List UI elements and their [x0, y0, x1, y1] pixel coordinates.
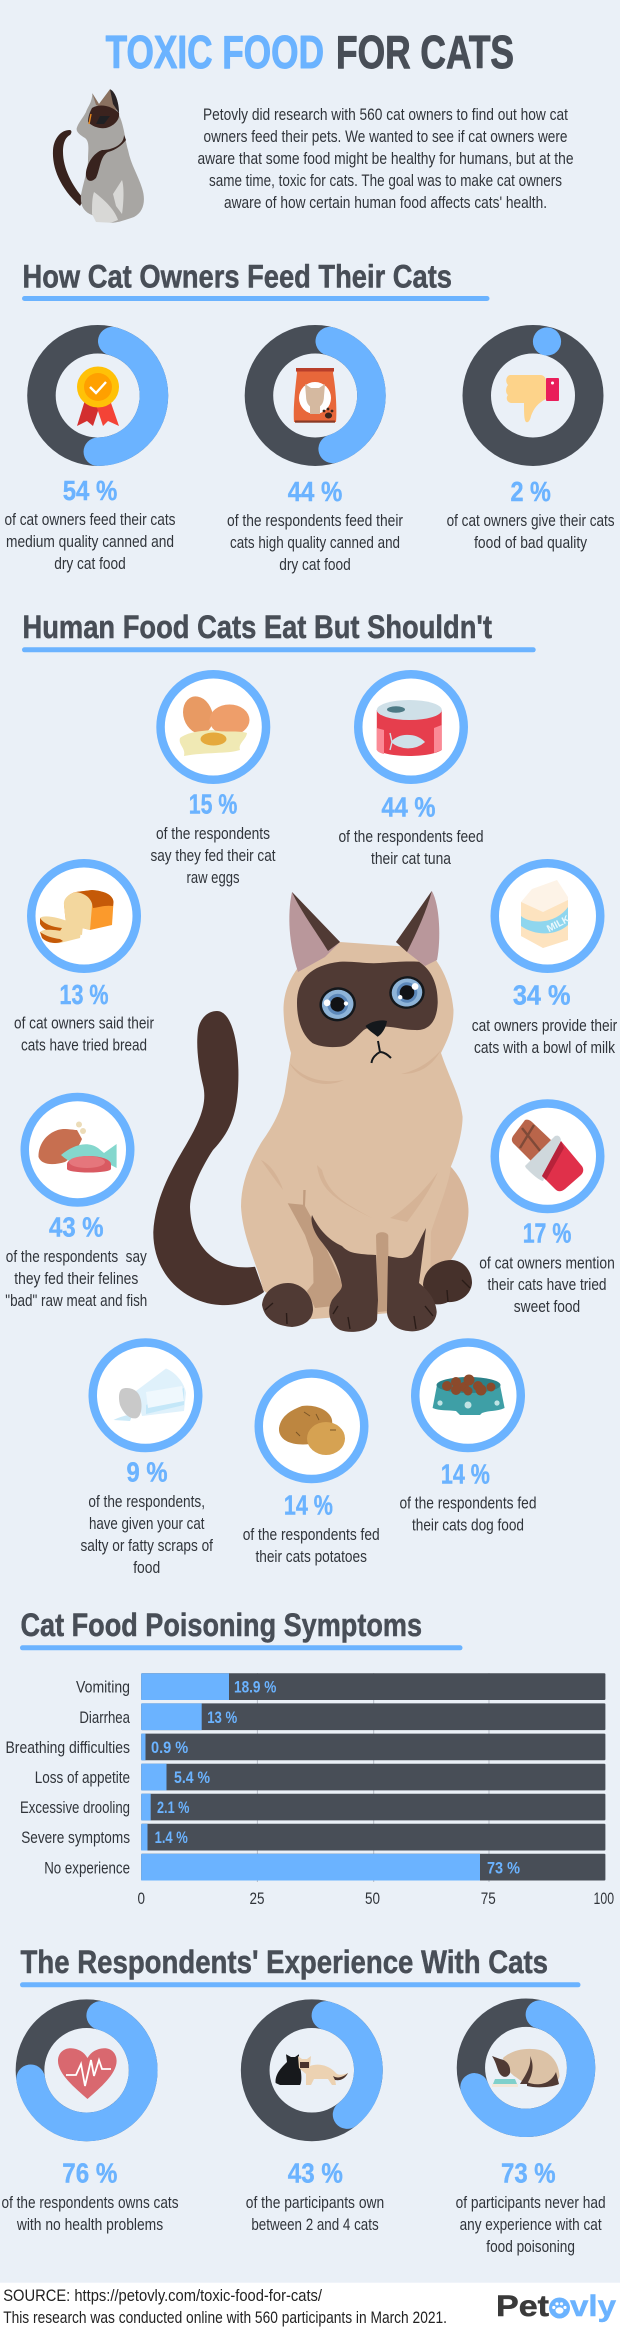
panel: 73 percent: 73 % — [501, 2157, 556, 2188]
panel: 44 percent: cats high quality canned and — [230, 533, 400, 552]
intro text — [198, 105, 574, 212]
panel: raw meat and fish: of the respondents say — [6, 1247, 147, 1266]
panel: tuna: 44 % — [382, 792, 436, 823]
panel: 2 percent: 2 % — [510, 476, 551, 507]
illustration: sad siamese cat — [153, 891, 472, 1332]
panel: raw meat and fish: they fed their felines — [14, 1269, 138, 1288]
panel: 76 percent: 76 % — [62, 2157, 117, 2188]
panel: dog food: 14 % — [441, 1458, 490, 1489]
panel: salty scraps: 9 % — [126, 1456, 168, 1487]
panel: 43 percent: of the participants own — [246, 2193, 384, 2212]
panel: dog food: their cats dog food — [412, 1516, 524, 1535]
panel: sweet food: 17 % — [523, 1218, 571, 1249]
cat mask — [297, 961, 438, 1047]
panel: 2 percent — [447, 327, 615, 552]
panel: raw meat and fish: "bad" raw meat and fish — [5, 1291, 147, 1310]
panel: raw eggs: raw eggs — [186, 868, 240, 887]
panel: 76 percent: with no health problems — [16, 2215, 163, 2234]
source text: This research was conducted online with 560 participants in March 2021. — [3, 2308, 447, 2327]
panel: salty scraps: have given your cat — [89, 1514, 205, 1533]
panel: 54 percent: 54 % — [63, 475, 117, 506]
panel: potatoes — [243, 1374, 380, 1566]
panel: 54 percent — [4, 327, 176, 573]
panel: 76 percent — [2, 2001, 178, 2234]
bar chart: symptoms: 13 % — [207, 1708, 237, 1727]
cat left eye — [317, 984, 359, 1024]
bar chart: symptoms: 5.4 % — [174, 1768, 210, 1787]
panel: bread — [14, 863, 154, 1054]
bar chart: symptoms: Loss of appetite — [35, 1768, 130, 1787]
icon: heart with pulse — [58, 2048, 117, 2099]
intro text: aware of how certain human food affects cats' health. — [224, 193, 547, 212]
source text: SOURCE: https://petovly.com/toxic-food-for-cats/ — [3, 2286, 322, 2305]
cat right haunch — [415, 1166, 468, 1285]
icon: cat eating — [492, 2049, 560, 2087]
bar chart: symptoms: 25 — [250, 1889, 264, 1908]
panel: 43 percent — [243, 2001, 384, 2234]
panel: raw eggs: say they fed their cat — [150, 846, 276, 865]
panel: 54 percent: medium quality canned and — [6, 532, 174, 551]
icon: cat food bag — [294, 368, 336, 423]
panel: raw eggs — [150, 674, 276, 887]
icon: tuna can — [377, 700, 442, 756]
cat tail — [153, 1011, 264, 1305]
bar chart: symptoms: 50 — [365, 1889, 380, 1908]
panel: raw eggs: 15 % — [189, 789, 237, 820]
cat left front paw — [262, 1283, 313, 1327]
panel: 44 percent — [227, 327, 403, 574]
icon: potatoes — [279, 1406, 345, 1455]
panel: 44 percent: of the respondents feed their — [227, 511, 403, 530]
bar chart: symptoms: Severe symptoms — [21, 1828, 130, 1847]
icon: meat and fish — [38, 1122, 117, 1172]
bar chart: symptoms: 73 % — [487, 1858, 520, 1877]
bar chart: symptoms: 2.1 % — [157, 1798, 189, 1817]
panel: sweet food — [479, 1104, 615, 1316]
panel: potatoes: of the respondents fed — [243, 1525, 380, 1544]
panel: milk — [472, 863, 618, 1057]
bar chart: symptoms: Breathing difficulties — [6, 1738, 130, 1757]
logo: Petovly — [496, 2290, 616, 2323]
panel: tuna: their cat tuna — [371, 849, 451, 868]
cat front legs — [311, 1215, 378, 1332]
bar chart: symptoms: Vomiting — [76, 1678, 130, 1697]
cat right eye — [387, 973, 427, 1012]
icon: chocolate bar — [512, 1120, 583, 1191]
heading: human food: Human Food Cats Eat But Shouldn't — [22, 609, 492, 645]
panel: 43 percent: between 2 and 4 cats — [251, 2215, 379, 2234]
panel: tuna — [338, 674, 484, 868]
heading: how cat owners feed: How Cat Owners Feed Their Cats — [22, 258, 452, 294]
panel: bread: cats have tried bread — [21, 1035, 147, 1054]
panel: potatoes: 14 % — [284, 1490, 333, 1521]
icon: dog food bowl — [433, 1374, 505, 1415]
panel: dog food — [400, 1343, 536, 1535]
icon: two cats — [276, 2054, 348, 2085]
icon: milk carton: MILK — [545, 914, 572, 935]
source text — [3, 2286, 447, 2327]
icon: salt shaker — [114, 1368, 186, 1421]
panel: dog food: of the respondents fed — [400, 1494, 536, 1513]
title: TOXIC FOOD — [106, 26, 324, 78]
panel: tuna: of the respondents feed — [338, 827, 484, 846]
panel: salty scraps — [80, 1343, 213, 1577]
panel: raw meat and fish — [5, 1097, 147, 1310]
panel: sweet food: sweet food — [514, 1297, 580, 1316]
logo: Petovly: Pet — [496, 2290, 549, 2323]
bar chart: symptoms: 18.9 % — [234, 1678, 276, 1697]
panel: raw meat and fish: 43 % — [49, 1211, 104, 1242]
icon: milk carton — [521, 880, 572, 948]
panel: salty scraps: food — [133, 1558, 160, 1577]
panel: 76 percent: of the respondents owns cats — [2, 2193, 178, 2212]
panel: 44 percent: dry cat food — [279, 555, 351, 574]
panel: bread: of cat owners said their — [14, 1013, 154, 1032]
bar chart: symptoms: No experience — [44, 1858, 130, 1877]
logo: Petovly: vly — [570, 2290, 616, 2323]
icon: medal — [77, 366, 119, 426]
cat right back paw — [423, 1260, 472, 1304]
bar chart: symptoms: 75 — [481, 1889, 496, 1908]
cat centre stripe — [376, 1232, 388, 1312]
bar chart: symptoms — [6, 1673, 614, 1908]
icon: bread loaf — [40, 890, 114, 943]
bar chart: symptoms: 0.9 % — [151, 1738, 188, 1757]
panel: 73 percent — [456, 2001, 606, 2256]
cat fur folds — [261, 1050, 441, 1222]
cat body — [241, 942, 463, 1320]
panel: 73 percent: food poisoning — [486, 2237, 575, 2256]
icon: eggs — [178, 692, 250, 756]
cat rear leg shadow — [288, 1190, 345, 1308]
panel: 54 percent: dry cat food — [54, 554, 126, 573]
panel: milk: 34 % — [513, 980, 571, 1011]
icon: thumbs down — [506, 375, 559, 422]
panel: potatoes: their cats potatoes — [255, 1547, 367, 1566]
panel: bread: 13 % — [60, 979, 108, 1010]
bar chart: symptoms: Excessive drooling — [20, 1798, 130, 1817]
panel: 2 percent: food of bad quality — [474, 533, 587, 552]
cat left ear — [289, 892, 340, 972]
heading: poisoning symptoms: Cat Food Poisoning Symptoms — [20, 1607, 422, 1643]
icon: grey cat sitting — [53, 89, 144, 223]
cat nose and mouth — [366, 1020, 391, 1063]
panel: salty scraps: of the respondents, — [88, 1492, 205, 1511]
panel: salty scraps: salty or fatty scraps of — [80, 1536, 213, 1555]
bar chart: symptoms: Diarrhea — [79, 1708, 130, 1727]
cat right ear — [396, 891, 439, 966]
footer — [0, 2283, 620, 2328]
title: FOR CATS — [336, 26, 514, 78]
panel: 43 percent: 43 % — [288, 2157, 343, 2188]
bar chart: symptoms: 0 — [137, 1889, 145, 1908]
panel: 44 percent: 44 % — [288, 476, 342, 507]
panel: raw eggs: of the respondents — [156, 824, 270, 843]
bar chart: symptoms: 1.4 % — [155, 1828, 188, 1847]
panel: 54 percent: of cat owners feed their cats — [4, 510, 176, 529]
